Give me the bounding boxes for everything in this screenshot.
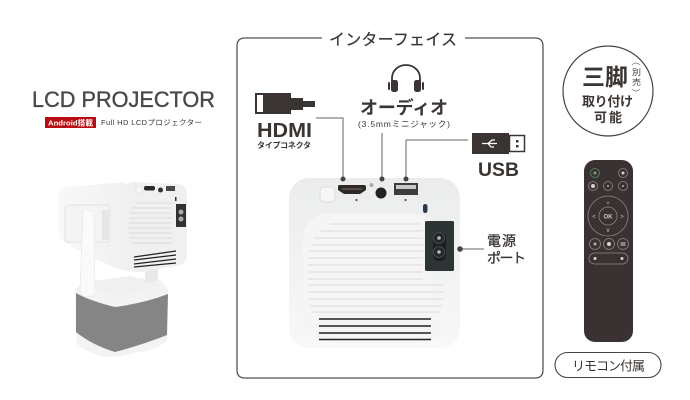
projector grille xyxy=(129,203,172,243)
device: projector rear xyxy=(289,178,460,348)
port: power xyxy=(425,221,454,271)
remote top buttons xyxy=(588,168,628,190)
callout: tripod: 別 xyxy=(632,68,641,77)
remote volume bar xyxy=(589,253,628,264)
label: 電源ポート: 電源 xyxy=(487,233,516,249)
label: USB: USB xyxy=(478,159,519,181)
projector ports xyxy=(136,186,186,227)
connector line: power xyxy=(457,246,484,252)
projector body side xyxy=(59,182,130,272)
icon: headphones xyxy=(388,65,424,92)
panel heading: インターフェイス xyxy=(329,31,457,49)
subtitle: Full HD LCDプロジェクター xyxy=(101,118,202,127)
remote d-pad: v xyxy=(606,228,610,234)
remote d-pad: OK xyxy=(604,214,613,220)
port: indicator xyxy=(370,183,374,187)
callout: tripod: 可能 xyxy=(594,110,622,125)
remote d-pad: ^ xyxy=(607,202,610,208)
label: 電源ポート xyxy=(487,233,526,266)
remote d-pad xyxy=(588,196,628,236)
projector front face xyxy=(123,182,187,272)
remote lower buttons xyxy=(590,238,628,250)
port: LED xyxy=(423,204,428,213)
projector arm back xyxy=(145,265,158,283)
projector side speaker dots xyxy=(102,210,109,240)
icon: USB plug xyxy=(472,133,524,154)
label pill: リモコン付属 xyxy=(555,352,661,378)
rear grille xyxy=(303,213,446,342)
port: audio jack xyxy=(376,188,386,198)
badge: Android搭載: Android搭載 xyxy=(48,118,94,128)
callout: tripod: 売 xyxy=(632,77,641,87)
connector line: audio xyxy=(380,133,384,182)
rear vents xyxy=(319,319,431,340)
product photo: projector xyxy=(59,182,187,357)
icon: HDMI plug xyxy=(256,93,315,114)
label: タイプコネクタ: タイプコネクタ xyxy=(257,140,311,150)
marks xyxy=(356,199,358,201)
callout: tripod: 取り付け xyxy=(582,94,633,109)
title: LCD PROJECTOR: LCD PROJECTOR xyxy=(32,87,215,112)
callout: tripod xyxy=(563,46,653,136)
projector vents xyxy=(134,251,176,267)
remote d-pad: > xyxy=(620,214,624,220)
remote d-pad: < xyxy=(592,214,596,220)
connector line: HDMI xyxy=(316,118,346,182)
port: USB xyxy=(394,183,418,195)
label: オーディオ: オーディオ xyxy=(360,97,448,118)
label: HDMI: HDMI xyxy=(257,119,312,142)
label: 電源ポート: ポート xyxy=(487,250,526,266)
label pill: リモコン付属: リモコン付属 xyxy=(572,358,645,374)
projector base xyxy=(75,276,168,357)
port: button xyxy=(320,187,335,202)
port: HDMI xyxy=(338,185,366,194)
callout: tripod: 三脚 xyxy=(582,64,628,90)
projector arm front xyxy=(80,210,95,297)
label: 3.5mmミニジャック: (3.5mmミニジャック) xyxy=(358,119,450,129)
remote control xyxy=(584,160,633,342)
connector line: USB xyxy=(404,140,468,182)
projector side panel xyxy=(65,205,110,242)
